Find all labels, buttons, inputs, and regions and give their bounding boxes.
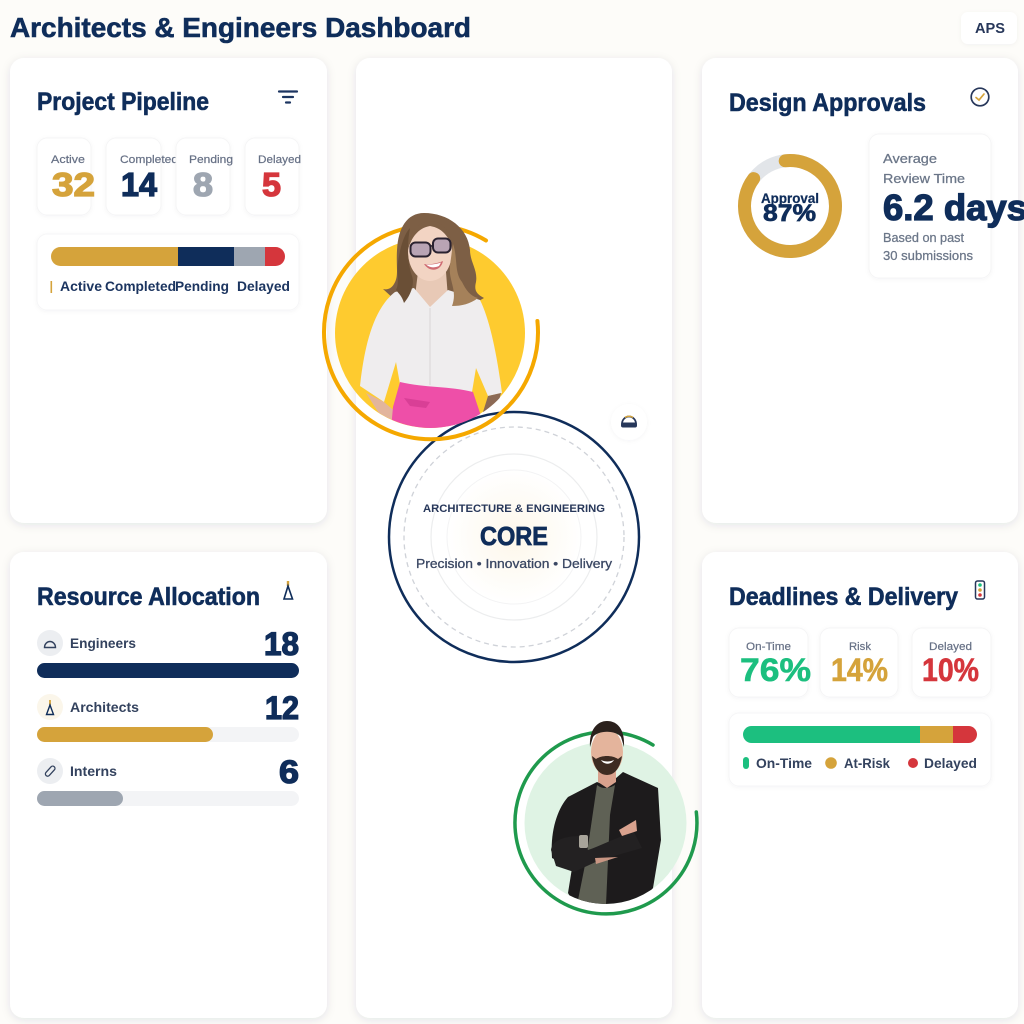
stat: delayed bbox=[245, 138, 301, 215]
stat: delayed: Delayed bbox=[929, 641, 972, 653]
legend: Pending bbox=[175, 278, 229, 294]
legend: At-Risk bbox=[844, 755, 890, 771]
panel: design approvals bbox=[702, 58, 1024, 523]
row: interns: Interns bbox=[70, 763, 117, 779]
review time card: Average bbox=[883, 151, 937, 166]
stat: active: Active bbox=[51, 154, 85, 166]
core eyebrow: ARCHITECTURE & ENGINEERING bbox=[423, 503, 605, 515]
stacked delivery bar bbox=[743, 726, 977, 743]
review time card: 30 submissions bbox=[883, 248, 973, 263]
core title: CORE bbox=[480, 521, 548, 551]
row: architects: 12 bbox=[265, 690, 299, 726]
pipeline progress card bbox=[37, 234, 299, 310]
icon: check circle bbox=[971, 88, 989, 106]
legend: Delayed bbox=[237, 278, 290, 294]
portrait ring bbox=[324, 225, 538, 439]
portrait: man bbox=[515, 721, 697, 914]
stat: delayed: 10% bbox=[922, 652, 979, 688]
row: interns bbox=[37, 754, 299, 806]
row: architects bbox=[37, 690, 299, 742]
portrait backdrop bbox=[335, 238, 525, 428]
icon: traffic light bbox=[976, 581, 984, 599]
review time card: Based on past bbox=[883, 230, 964, 245]
legend: Delayed bbox=[924, 755, 977, 771]
stat: delayed: Delayed bbox=[258, 154, 301, 166]
portrait backdrop bbox=[524, 742, 686, 904]
stat: completed: 14 bbox=[121, 166, 158, 203]
panel: deadlines and delivery bbox=[702, 552, 1018, 1018]
stat: delayed: 5 bbox=[262, 166, 281, 203]
legend bbox=[50, 278, 290, 294]
row: engineers: 18 bbox=[264, 626, 299, 662]
core diagram bbox=[389, 412, 639, 662]
badge: APS bbox=[961, 12, 1017, 44]
stat: pending bbox=[176, 138, 233, 215]
stat: completed bbox=[106, 138, 178, 215]
panel: project pipeline bbox=[10, 58, 327, 523]
core tagline: Precision • Innovation • Delivery bbox=[416, 556, 613, 571]
heading: deadlines and delivery: Deadlines & Delivery bbox=[729, 583, 958, 611]
row: interns: 6 bbox=[279, 754, 299, 790]
stat: delayed bbox=[912, 628, 991, 697]
stat: on-time: On-Time bbox=[746, 641, 791, 653]
portrait: woman bbox=[324, 213, 538, 440]
stat: active bbox=[37, 138, 95, 215]
stat: risk: 14% bbox=[831, 652, 888, 688]
review time card: Review Time bbox=[883, 171, 965, 186]
badge: APS: APS bbox=[975, 21, 1005, 37]
heading: project pipeline: Project Pipeline bbox=[37, 88, 209, 116]
stat: on-time: 76% bbox=[740, 652, 811, 688]
donut chart: approval 87% bbox=[744, 160, 836, 252]
panel: resource allocation bbox=[10, 552, 327, 1018]
legend: On-Time bbox=[756, 755, 812, 771]
heading: resource allocation: Resource Allocation bbox=[37, 583, 260, 611]
icon: compass bbox=[284, 581, 292, 599]
legend: Completed bbox=[105, 278, 176, 294]
stacked progress bar bbox=[51, 247, 285, 266]
delivery progress card bbox=[729, 713, 991, 786]
review time card bbox=[869, 134, 1024, 278]
stat: active: 32 bbox=[52, 166, 95, 203]
row: engineers: Engineers bbox=[70, 635, 136, 651]
review time card: 6.2 days bbox=[883, 187, 1024, 228]
legend: Active bbox=[60, 278, 102, 294]
donut chart: approval 87%: 87% bbox=[763, 200, 816, 227]
heading: design approvals: Design Approvals bbox=[729, 89, 926, 117]
icon: hard hat badge bbox=[611, 404, 647, 440]
stat: pending: 8 bbox=[193, 166, 213, 203]
legend bbox=[743, 755, 977, 771]
row: engineers bbox=[37, 626, 299, 678]
icon: filter bbox=[279, 92, 297, 102]
stat: risk: Risk bbox=[849, 641, 872, 653]
stat: pending: Pending bbox=[189, 154, 233, 166]
stat: completed: Completed bbox=[120, 154, 178, 166]
stat: on-time bbox=[729, 628, 811, 697]
stat: risk bbox=[820, 628, 898, 697]
page title: Architects & Engineers Dashboard bbox=[10, 12, 471, 43]
panel: centre column bbox=[356, 58, 672, 1018]
portrait ring bbox=[515, 732, 697, 914]
row: architects: Architects bbox=[70, 699, 139, 715]
donut chart: approval 87%: Approval bbox=[761, 190, 819, 206]
figure bbox=[551, 721, 661, 905]
figure bbox=[360, 213, 502, 440]
